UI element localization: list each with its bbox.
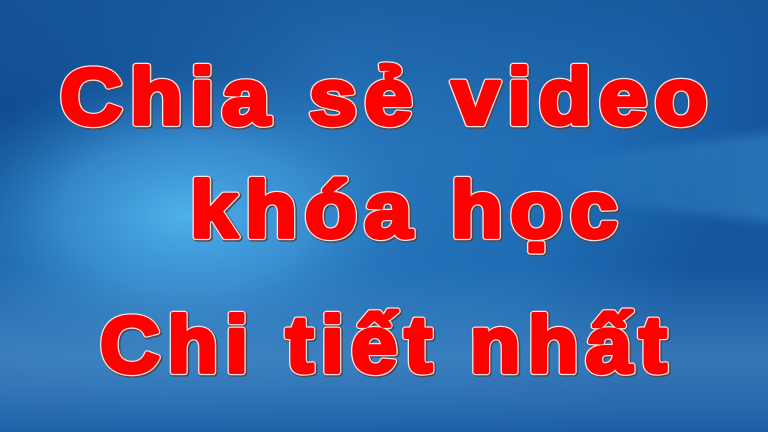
heading line 3: Chi tiết nhất: Chi tiết nhất: [101, 301, 675, 390]
heading line 2: khóa học: khóa học: [190, 165, 625, 254]
heading line 3: Chi tiết nhất: Chi tiết nhất: [100, 300, 674, 389]
heading line 1: Chia sẻ video: Chia sẻ video: [61, 53, 716, 142]
heading line 2: khóa học: khóa học: [191, 166, 626, 255]
heading line 2: khóa học: khóa học: [190, 165, 625, 254]
heading line 3: Chi tiết nhất: Chi tiết nhất: [100, 300, 674, 389]
heading line 1: Chia sẻ video: Chia sẻ video: [60, 52, 715, 141]
heading line 1: Chia sẻ video: Chia sẻ video: [60, 52, 715, 141]
